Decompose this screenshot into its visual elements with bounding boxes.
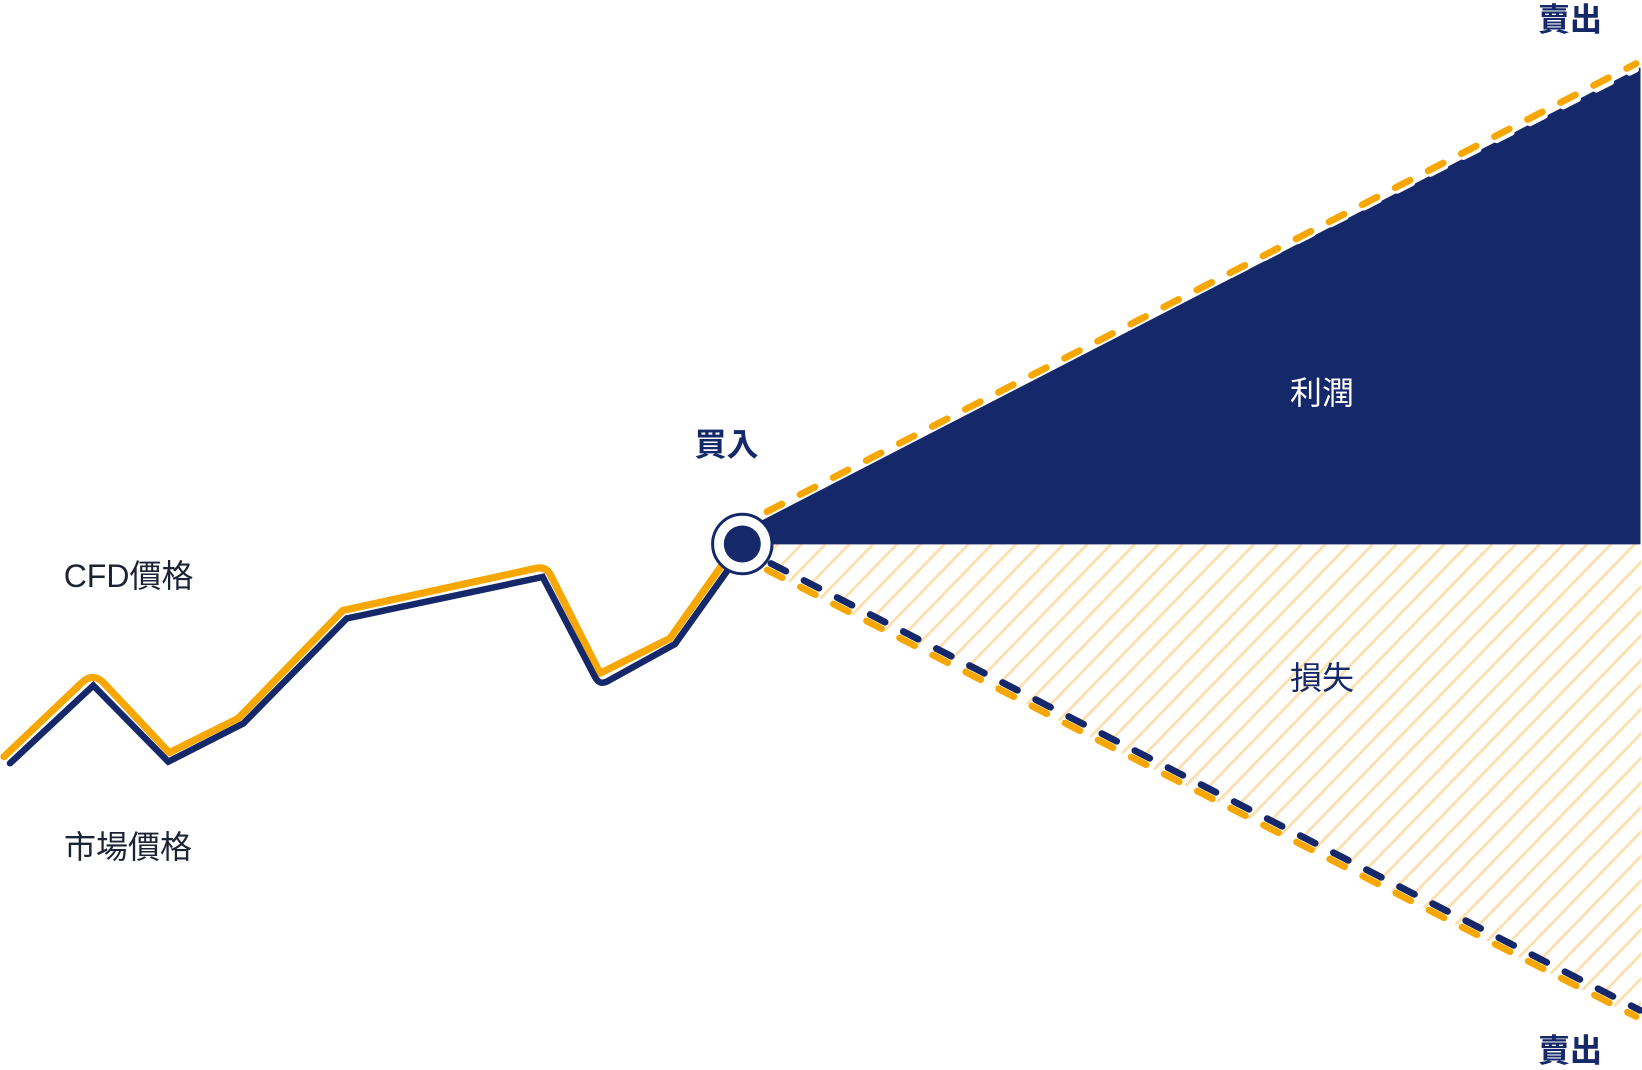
price line: market price [10, 560, 735, 763]
label: buy: 買入 [694, 426, 759, 462]
white halo under upper dashed line [767, 69, 1636, 511]
price line: CFD price [4, 561, 725, 757]
loss area: hatched region [716, 544, 1641, 1020]
lower dashed line: market price [738, 546, 1640, 1010]
label: market price: 市場價格 [64, 829, 192, 865]
lower dashed line: CFD price [767, 570, 1636, 1016]
label: loss: 損失 [1290, 660, 1354, 696]
buy point marker [713, 514, 772, 574]
label: sell top: 賣出 [1538, 2, 1602, 38]
label: CFD price: CFD價格 [64, 558, 193, 594]
upper dashed line: sell at profit [767, 64, 1636, 512]
label: sell bottom: 賣出 [1538, 1032, 1602, 1068]
profit area: navy triangle [716, 68, 1640, 544]
label: profit: 利潤 [1290, 375, 1354, 411]
